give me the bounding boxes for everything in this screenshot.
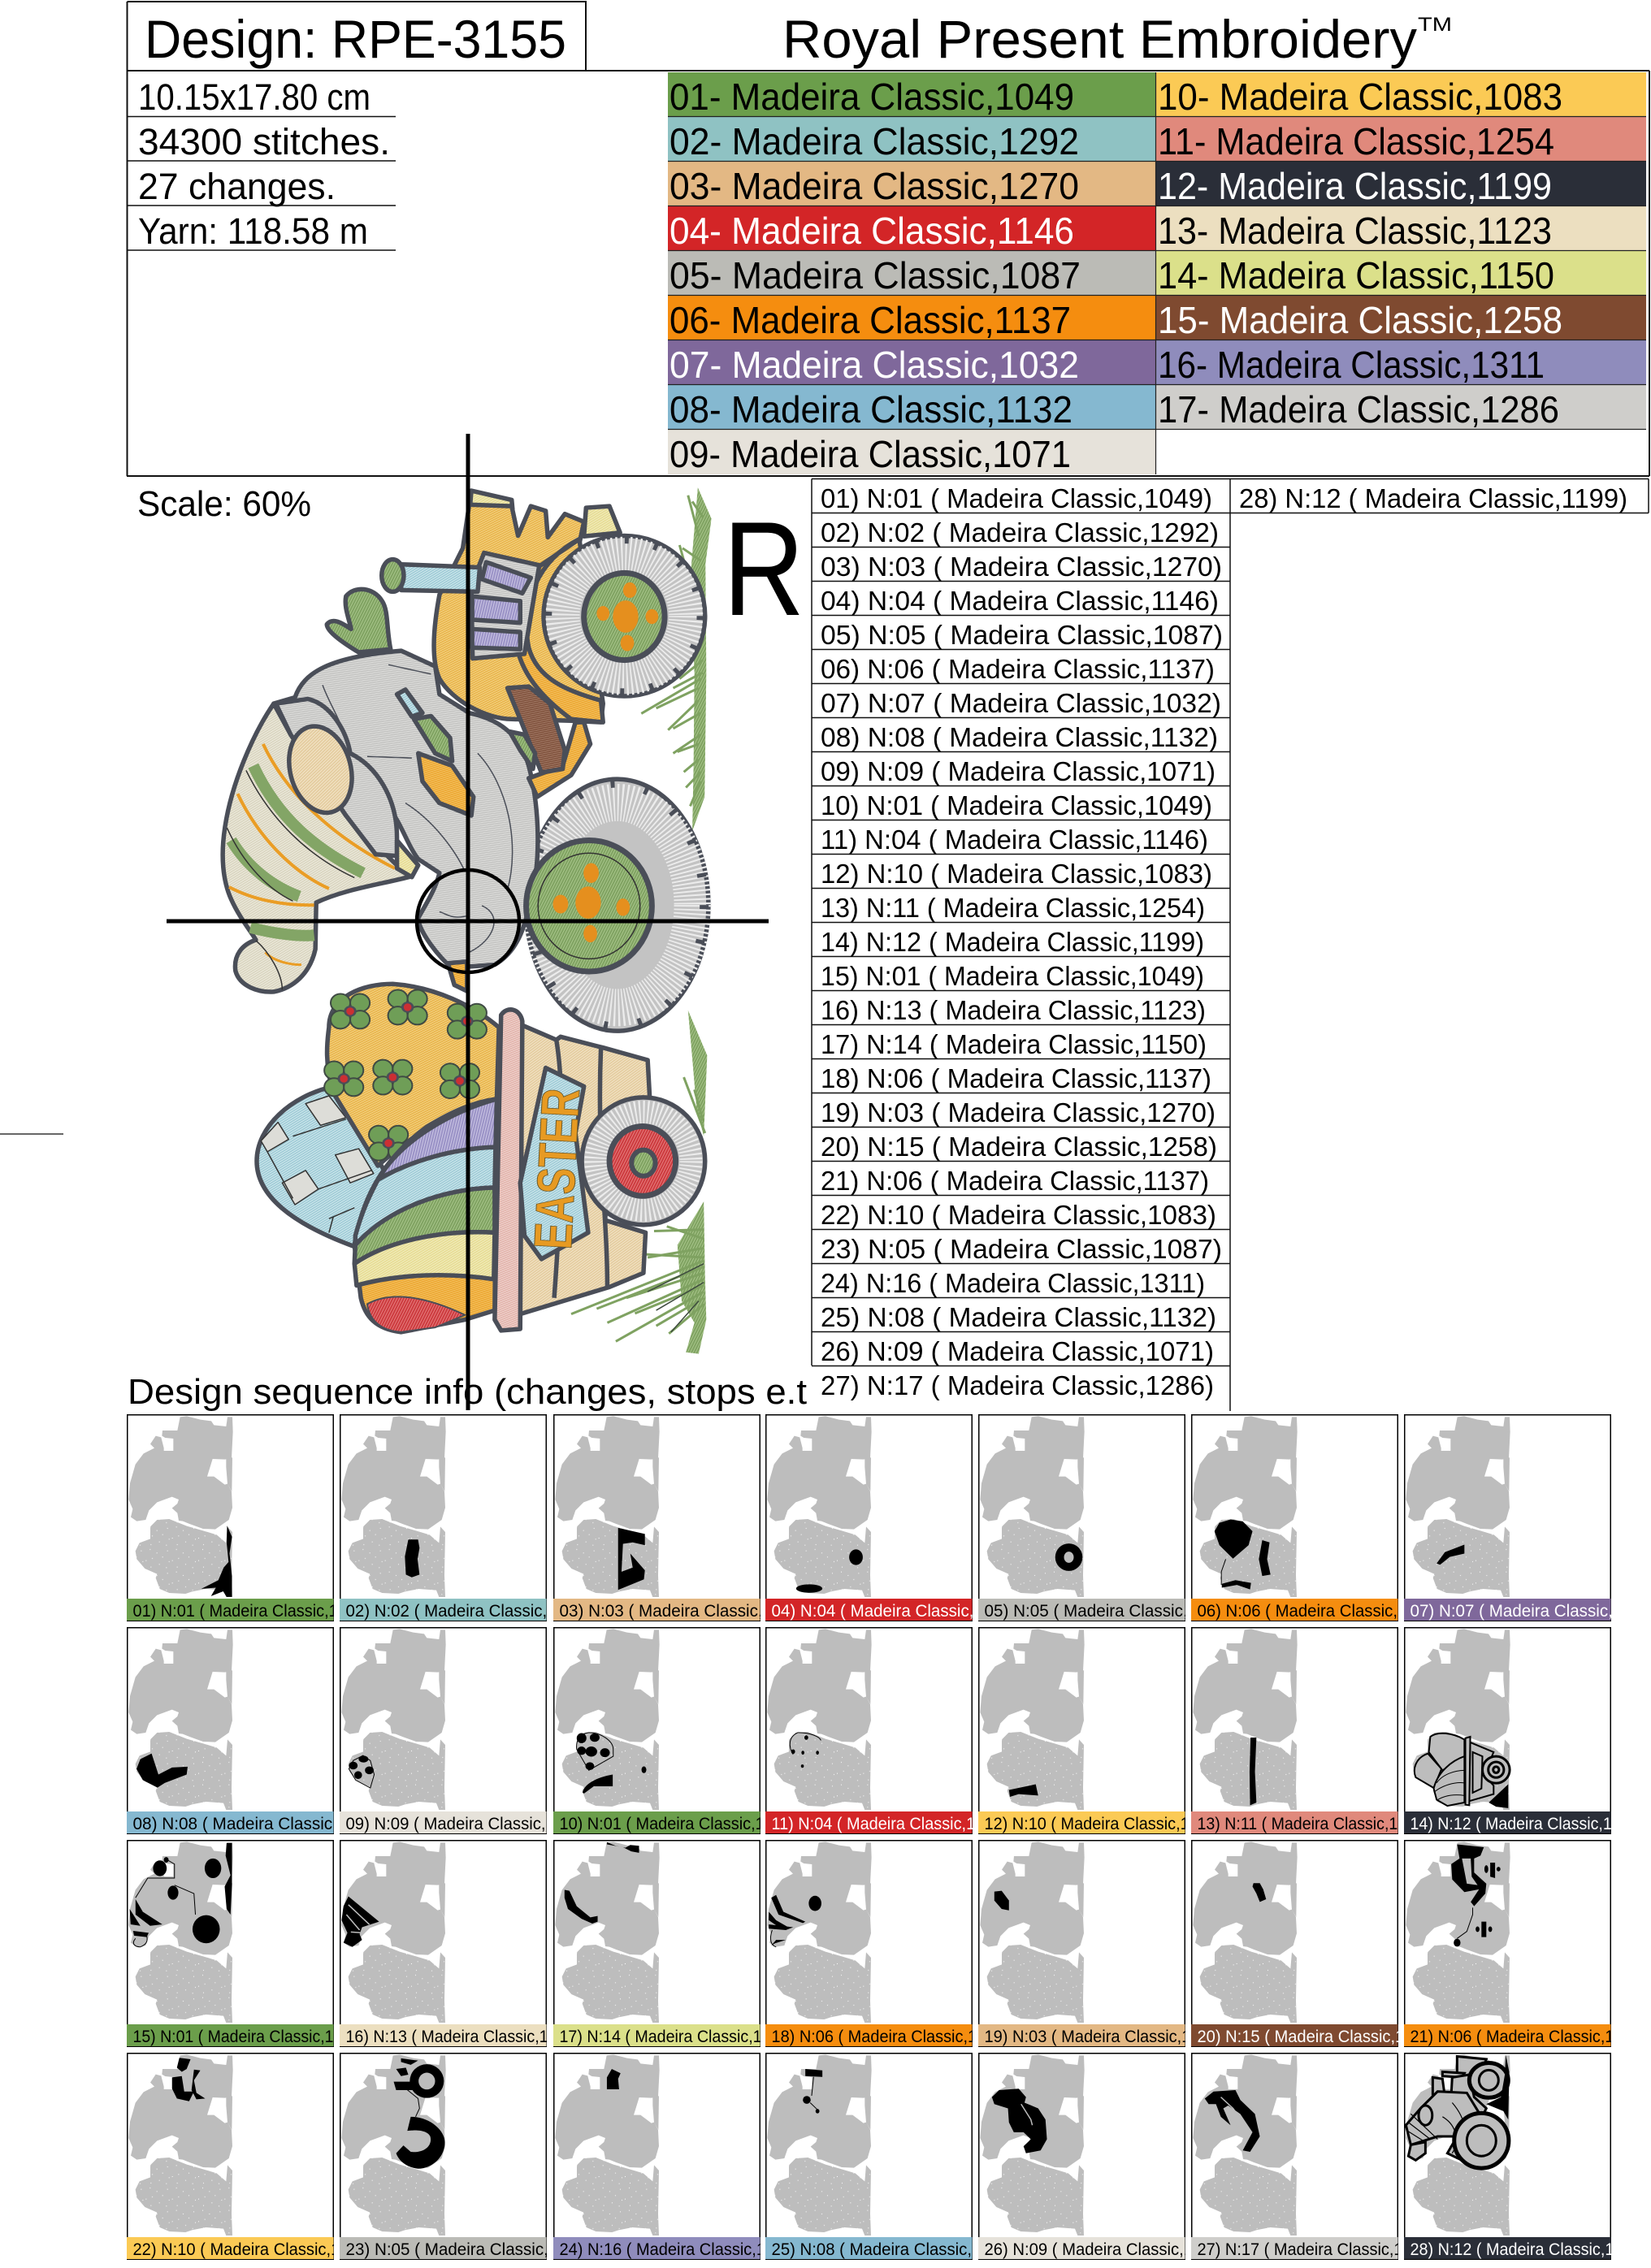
stitch area 08 [136, 1754, 188, 1788]
thread colour table: 17- Madeira Classic,1286 [1158, 388, 1559, 431]
thumbnail 19 [978, 1840, 1224, 2047]
design specs: Yarn: 118.58 m [138, 210, 368, 252]
stitch area 02 [405, 1539, 419, 1578]
centre crosshair [167, 434, 769, 1410]
list rows: 15) N:01 ( Madeira Classic,1049) [821, 961, 1204, 991]
label 02: 02) N:02 ( Madeira Classic,1292) [346, 1602, 590, 1621]
sequence heading: Design sequence info (changes, stops e.t [128, 1372, 807, 1412]
stitch area 10 [577, 1733, 647, 1794]
thread colour table: 04- Madeira Classic,1146 [670, 210, 1074, 252]
thumbnail 09 [340, 1627, 588, 1834]
yellow egg [327, 984, 499, 1166]
stitch area 26 [992, 2088, 1047, 2153]
thumbnail 27 [1191, 2053, 1435, 2260]
thumbnail 11 [765, 1627, 1006, 1834]
thumbnail 07 [1404, 1414, 1651, 1621]
list rows: 03) N:03 ( Madeira Classic,1270) [821, 552, 1222, 582]
stitch area 27 [1205, 2090, 1260, 2152]
scale label: Scale: 60% [137, 484, 311, 524]
thumbnail 20 [1191, 1840, 1436, 2047]
list rows: 04) N:04 ( Madeira Classic,1146) [821, 586, 1219, 616]
list rows: 08) N:08 ( Madeira Classic,1132) [821, 722, 1218, 752]
small green leaf [509, 732, 535, 769]
list rows: 06) N:06 ( Madeira Classic,1137) [821, 654, 1215, 684]
stitch area 04 [796, 1549, 863, 1593]
stitch area 01 [202, 1526, 232, 1597]
list rows: 09) N:09 ( Madeira Classic,1071) [821, 756, 1216, 786]
front wheel [544, 536, 705, 696]
pencil and leaf [397, 690, 474, 816]
rotation letter R: R [723, 494, 804, 643]
thumbnail 25 [765, 2053, 1012, 2260]
thumbnail 24 [553, 2053, 796, 2260]
embroidery lower: Easter truck with eggs [257, 984, 707, 1354]
thread colour table: 01- Madeira Classic,1049 [670, 76, 1074, 118]
stitch area 14 [1415, 1733, 1510, 1808]
design specs: 34300 stitches. [138, 121, 390, 162]
thumbnail 14 [1404, 1627, 1643, 1834]
stitch area 23 [394, 2058, 444, 2169]
thumbnail 03 [553, 1414, 806, 1621]
list rows: 11) N:04 ( Madeira Classic,1146) [821, 825, 1208, 855]
stitch area 09 [349, 1755, 375, 1788]
list rows: 14) N:12 ( Madeira Classic,1199) [821, 927, 1204, 957]
thread colour table [668, 72, 1646, 475]
thread colour table: 14- Madeira Classic,1150 [1158, 254, 1554, 296]
tractor body [434, 504, 603, 722]
list rows [821, 483, 1627, 1400]
stitch area 12 [1009, 1785, 1038, 1797]
thumbnail 04 [765, 1414, 1016, 1621]
stitch area 13 [1250, 1738, 1256, 1805]
header frame [127, 2, 1649, 476]
label 23: 23) N:05 ( Madeira Classic,1087) [346, 2240, 592, 2259]
grass top [641, 487, 712, 831]
orange bit under the gnome [448, 962, 467, 991]
embroidery upper: gnome and tractor [223, 487, 712, 1031]
label 04: 04) N:04 ( Madeira Classic,1146) [772, 1602, 1016, 1621]
title: brand: TM [1418, 14, 1452, 36]
gnome wrinkle lines [323, 664, 513, 952]
gnome body [274, 651, 538, 967]
list rows: 05) N:05 ( Madeira Classic,1087) [821, 620, 1223, 650]
gnome arm fold [276, 699, 397, 856]
title: design number: Design: RPE-3155 [145, 9, 566, 69]
list rows: 18) N:06 ( Madeira Classic,1137) [821, 1063, 1211, 1093]
tractor pale block [584, 506, 620, 536]
truck bed panels [520, 1024, 650, 1314]
list rows: 19) N:03 ( Madeira Classic,1270) [821, 1097, 1216, 1128]
stitch area 20 [1253, 1883, 1266, 1902]
truck wheel [582, 1097, 705, 1225]
title: brand: Royal Present Embroidery [782, 9, 1417, 69]
label 03: 03) N:03 ( Madeira Classic,1270) [559, 1602, 806, 1621]
stitch area 19 [994, 1891, 1009, 1911]
thread colour table: 13- Madeira Classic,1123 [1158, 210, 1552, 252]
list rows: 24) N:16 ( Madeira Classic,1311) [821, 1268, 1205, 1298]
thread colour table: 15- Madeira Classic,1258 [1158, 299, 1562, 341]
list rows: 07) N:07 ( Madeira Classic,1032) [821, 688, 1221, 718]
thread colour table: 06- Madeira Classic,1137 [670, 299, 1071, 341]
thread colour table: 12- Madeira Classic,1199 [1158, 165, 1552, 207]
thumbnail 22 [127, 2053, 372, 2260]
thread colour table: 03- Madeira Classic,1270 [670, 165, 1079, 207]
thumbnail 15 [127, 1840, 366, 2047]
stitch area 07 [1436, 1544, 1464, 1565]
list rows: 10) N:01 ( Madeira Classic,1049) [821, 790, 1212, 820]
grass bottom [571, 1011, 707, 1354]
thumbnail 23 [340, 2053, 592, 2260]
Easter lettering: EASTER [522, 1087, 591, 1251]
stitch area 24 [607, 2069, 621, 2089]
thumbnail 05 [978, 1414, 1230, 1621]
egg flowers [324, 990, 487, 1161]
thumbnail 26 [978, 2053, 1225, 2260]
tractor fender [516, 539, 603, 722]
list rows: 25) N:08 ( Madeira Classic,1132) [821, 1302, 1216, 1332]
thread colour table: 08- Madeira Classic,1132 [670, 388, 1072, 431]
rainbow egg [354, 1099, 496, 1332]
pink strip [495, 1010, 522, 1331]
stitch area 18 [769, 1895, 821, 1947]
thread colour table: 11- Madeira Classic,1254 [1158, 120, 1554, 162]
thumbnail 06 [1191, 1414, 1438, 1621]
list rows: 21) N:06 ( Madeira Classic,1137) [821, 1166, 1209, 1196]
list rows: 12) N:10 ( Madeira Classic,1083) [821, 859, 1212, 889]
list rows: 22) N:10 ( Madeira Classic,1083) [821, 1200, 1216, 1230]
design specs: 27 changes. [138, 166, 336, 207]
label 08: 08) N:08 ( Madeira Classic,1132) [133, 1815, 379, 1833]
thumbnail 12 [978, 1627, 1222, 1834]
exhaust pipe [382, 560, 480, 591]
stitch area 16 [341, 1896, 379, 1947]
list rows: 23) N:05 ( Madeira Classic,1087) [821, 1234, 1222, 1264]
thread colour table: 10- Madeira Classic,1083 [1158, 76, 1562, 118]
tractor top cap [470, 491, 513, 509]
stitch area 21 [1451, 1845, 1501, 1946]
design specs [127, 76, 396, 252]
label 05: 05) N:05 ( Madeira Classic,1087) [985, 1602, 1230, 1621]
list rows: 16) N:13 ( Madeira Classic,1123) [821, 995, 1206, 1025]
list rows: 02) N:02 ( Madeira Classic,1292) [821, 517, 1219, 548]
brown seat [508, 686, 565, 773]
thumbnail 13 [1191, 1627, 1430, 1834]
stray tick mark [0, 1133, 63, 1135]
thread colour table: 02- Madeira Classic,1292 [670, 120, 1079, 162]
gnome face [282, 723, 359, 816]
stitch area 25 [803, 2069, 822, 2114]
thread colour table: 09- Madeira Classic,1071 [670, 433, 1071, 475]
sequence list [812, 479, 1649, 1411]
rear wheel hub [526, 841, 652, 972]
tractor rear wheel [526, 779, 708, 1031]
stitch area 11 [790, 1733, 821, 1768]
list rows: 28) N:12 ( Madeira Classic,1199) [1239, 483, 1627, 513]
carrot lower fender [529, 722, 591, 797]
list rows: 20) N:15 ( Madeira Classic,1258) [821, 1132, 1217, 1162]
stitch area 15 [130, 1843, 232, 1947]
stitch area 22 [172, 2058, 206, 2101]
thumbnail 28 [1404, 2053, 1644, 2260]
thread colour table: 07- Madeira Classic,1032 [670, 344, 1079, 386]
list rows: 17) N:14 ( Madeira Classic,1150) [821, 1029, 1207, 1059]
blue egg [257, 1087, 384, 1247]
pale scarf end [397, 841, 418, 877]
gnome hat [223, 703, 412, 992]
thread colour table: 16- Madeira Classic,1311 [1158, 344, 1545, 386]
mitten leaf [327, 589, 391, 652]
Easter sign board [520, 1068, 588, 1259]
list grid [812, 479, 1649, 1411]
thumbnail 02 [340, 1414, 590, 1621]
thumbnail 16 [340, 1840, 578, 2047]
thumbnail 17 [553, 1840, 793, 2047]
list rows: 26) N:09 ( Madeira Classic,1071) [821, 1336, 1214, 1366]
stitch area 06 [1215, 1519, 1271, 1590]
design specs: 10.15x17.80 cm [138, 76, 370, 118]
thumbnail 08 [127, 1627, 379, 1834]
thumbnail 10 [553, 1627, 796, 1834]
thread colour table: 05- Madeira Classic,1087 [670, 254, 1081, 296]
tractor grille [471, 553, 540, 659]
stitch area 28 [1406, 2055, 1509, 2168]
list rows: 01) N:01 ( Madeira Classic,1049) [821, 483, 1212, 513]
thumbnail 01 [127, 1414, 370, 1621]
list rows: 27) N:17 ( Madeira Classic,1286) [821, 1370, 1214, 1400]
stitch area 05 [1055, 1543, 1082, 1571]
hat stripes [227, 744, 395, 989]
thumbnail 21 [1404, 1840, 1644, 2047]
list rows: 13) N:11 ( Madeira Classic,1254) [821, 893, 1205, 923]
thumbnail 18 [765, 1840, 1008, 2047]
stitch area 03 [618, 1528, 645, 1590]
stitch area 17 [565, 1842, 639, 1924]
